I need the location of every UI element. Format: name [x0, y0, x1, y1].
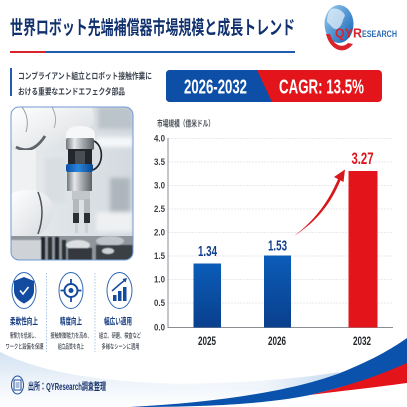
bar 2025: 2025 — [198, 334, 216, 348]
feature: 幅広い適用: 幅広い適用 — [104, 316, 132, 326]
icon: document — [12, 376, 24, 394]
bar 2025: 1.34 — [198, 243, 217, 260]
bar 2032: 2032 — [353, 334, 371, 348]
CAGR banner: CAGR: 13.5% — [279, 76, 364, 98]
y axis labels: 4.0 — [154, 134, 165, 144]
feature: 柔軟性向上: 衝撃力を低減し、 — [10, 330, 38, 340]
y axis labels: 3.0 — [154, 180, 165, 190]
bar 2025 — [194, 243, 221, 348]
CAGR banner: 2026-2032 — [184, 76, 247, 98]
y axis labels: 2.0 — [154, 228, 165, 238]
growth arrow — [294, 170, 345, 236]
y axis labels: 3.5 — [154, 157, 165, 167]
feature: 精度向上: 組立品質を向上 — [58, 342, 84, 350]
CAGR banner — [166, 70, 382, 102]
y axis labels: 1.5 — [154, 251, 165, 261]
icon: target — [59, 272, 83, 308]
feature: 柔軟性向上: ワークと設備を保護 — [6, 342, 44, 350]
feature: 精度向上: 精度向上 — [60, 316, 82, 326]
bar 2026: 1.53 — [268, 238, 287, 254]
photo: robot end effector — [11, 107, 133, 260]
feature: 精度向上 — [50, 272, 92, 350]
y axis labels — [154, 134, 165, 332]
chart unit label: 市場規模（億米ドル） — [157, 118, 214, 128]
bar 2026 — [264, 238, 291, 348]
logo: QYResearch: ESEARCH — [362, 29, 397, 39]
icon: growth bars — [107, 272, 132, 308]
y axis labels: 0.0 — [154, 322, 165, 332]
logo: QYResearch — [324, 5, 397, 50]
icon: shield — [12, 272, 36, 308]
bar chart — [154, 118, 393, 348]
feature: 柔軟性向上: 柔軟性向上 — [10, 316, 38, 326]
y axis labels: 2.5 — [154, 204, 165, 214]
bar 2026: 2026 — [268, 334, 286, 348]
background swoosh — [0, 338, 407, 407]
bar 2032 — [348, 149, 378, 348]
source note: 出所：QYResearch調査整理 — [28, 380, 106, 393]
feature: 精度向上: 接触制御能力を高め、 — [50, 330, 92, 340]
subtitle text block: おける重要なエンドエフェクタ部品 — [18, 86, 125, 96]
y axis labels: 1.0 — [154, 274, 165, 284]
y axis labels: 0.5 — [154, 298, 165, 308]
feature: 幅広い適用 — [99, 272, 141, 350]
bar 2032: 3.27 — [352, 149, 374, 168]
subtitle text block — [10, 68, 152, 96]
subtitle text block: コンプライアント組立とロボット接触作業に — [18, 71, 152, 81]
title underline — [10, 51, 295, 53]
logo: QYResearch: QYR — [335, 26, 363, 40]
feature: 幅広い適用: 組立、研磨、検査など — [99, 330, 141, 340]
source note — [12, 376, 106, 394]
feature: 柔軟性向上 — [6, 272, 44, 350]
feature: 幅広い適用: 多様なシーンに適用 — [102, 342, 140, 350]
